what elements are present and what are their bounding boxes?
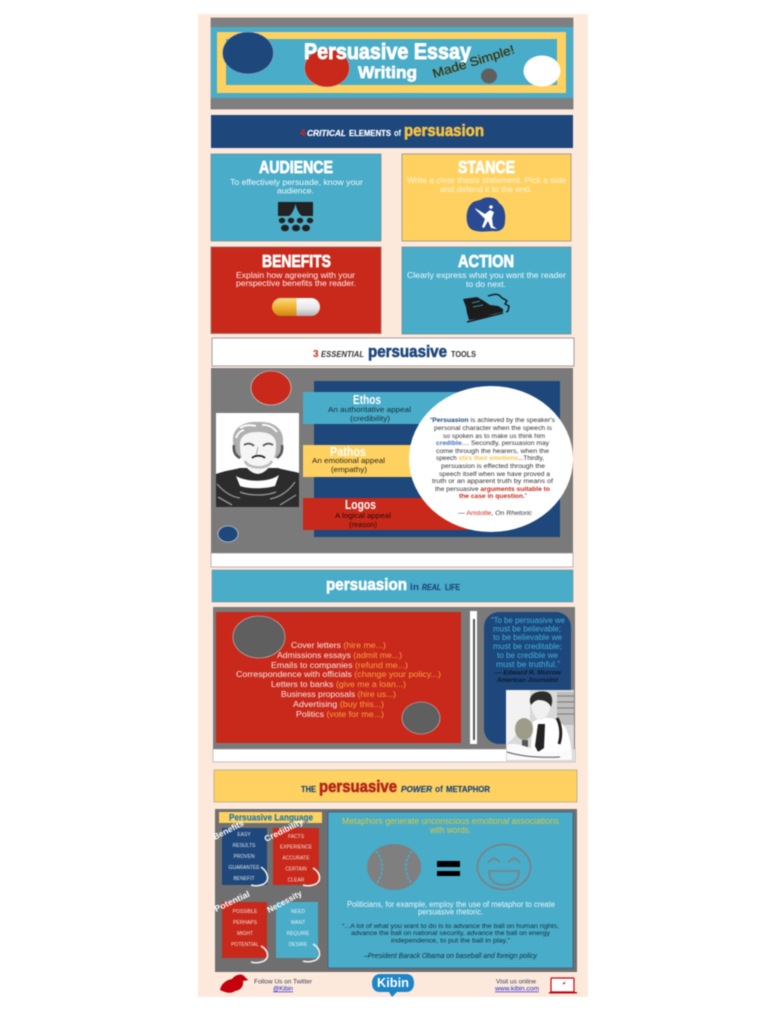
card: benefits words: RESULTS bbox=[233, 843, 256, 849]
panel: audience: AUDIENCE bbox=[259, 157, 333, 177]
panel: stance bbox=[402, 154, 571, 241]
heading: 4 critical elements of persuasion: CRITICAL bbox=[307, 128, 346, 138]
callout: Aristotle quote: truth or an apparent truth by means of bbox=[432, 478, 553, 485]
panel: audience bbox=[211, 154, 381, 241]
heading: persuasion in real life: in bbox=[410, 582, 419, 592]
card: necessity words: Necessity bbox=[265, 888, 304, 915]
card: logos: Logos bbox=[345, 497, 376, 512]
panel: stance: STANCE bbox=[458, 157, 515, 177]
panel: metaphor explanation: “...A lot of what you want to do is to advance the ball on human rights, bbox=[342, 923, 559, 930]
callout: Aristotle quote: so spoken as to make us think him bbox=[443, 433, 545, 440]
examples list: Business proposals (hire us...) bbox=[281, 689, 396, 699]
icon: theatre audience bbox=[278, 202, 313, 231]
examples list bbox=[216, 612, 461, 743]
heading: 4 critical elements of persuasion: ELEMENTS bbox=[349, 128, 391, 138]
heading: 3 essential persuasive tools: persuasive bbox=[368, 343, 447, 361]
card: potential words bbox=[213, 889, 268, 963]
panel: metaphor explanation: persuasive rhetoric. bbox=[418, 908, 483, 916]
callout: Aristotle quote: credible.... Secondly, persuasion may bbox=[436, 440, 550, 447]
panel: stance: and defend it to the end. bbox=[440, 184, 532, 194]
icon: baseball bbox=[367, 844, 421, 890]
card: logos: (reason) bbox=[349, 520, 377, 529]
heading: 3 essential persuasive tools bbox=[212, 338, 574, 366]
footer: Kibin logo: Kibin bbox=[377, 975, 409, 990]
footer: twitter follow: @Kibin bbox=[273, 986, 293, 992]
panel: audience: audience. bbox=[277, 186, 314, 196]
card: logos: A logical appeal bbox=[335, 511, 391, 520]
heading: 4 critical elements of persuasion: of bbox=[394, 128, 402, 138]
panel: real life examples bbox=[213, 607, 575, 762]
callout: Murrow quote bbox=[484, 612, 571, 744]
header banner: Made Simple! bbox=[431, 43, 516, 81]
callout: Aristotle quote: personal character when the speech is bbox=[434, 425, 553, 432]
card: benefits words: GUARANTEE bbox=[228, 865, 260, 871]
heading: the persuasive power of metaphor: POWER bbox=[401, 784, 433, 794]
heading: persuasion in real life: REAL bbox=[422, 582, 441, 592]
examples list: Politics (vote for me...) bbox=[296, 709, 384, 719]
heading: the persuasive power of metaphor: of bbox=[435, 784, 444, 794]
callout: Aristotle quote: “Persuasion is achieved by the speaker's bbox=[430, 417, 556, 424]
card: credibility words: CERTAIN bbox=[285, 866, 307, 872]
card: credibility words: ACCURATE bbox=[282, 856, 310, 862]
heading: the persuasive power of metaphor: METAPHOR bbox=[446, 784, 490, 794]
card: pathos: An emotional appeal bbox=[312, 456, 385, 465]
callout: Murrow quote: “To be persuasive we bbox=[491, 616, 566, 625]
card: benefits words: BENEFIT bbox=[233, 876, 255, 882]
card: credibility words: EXPERIENCE bbox=[280, 844, 313, 850]
card: credibility words: Credibility bbox=[262, 816, 305, 844]
portrait: Aristotle bbox=[216, 413, 299, 507]
panel: benefits bbox=[211, 247, 381, 334]
heading: the persuasive power of metaphor bbox=[214, 770, 577, 802]
panel: metaphor explanation: Politicians, for example, employ the use of metaphor to create bbox=[347, 900, 555, 909]
card: necessity words: NEED bbox=[291, 909, 305, 915]
callout: Aristotle quote: speech itself when we have proved a bbox=[439, 471, 550, 478]
panel: action bbox=[402, 247, 571, 334]
panel: metaphor explanation: with words. bbox=[429, 825, 471, 835]
heading: the persuasive power of metaphor: persuasive bbox=[319, 778, 397, 796]
panel: metaphor explanation: Metaphors generate unconscious emotional associations bbox=[342, 816, 560, 826]
heading: persuasion in real life: LIFE bbox=[445, 582, 460, 592]
panel: three tools bbox=[211, 368, 573, 567]
icon: red bird bbox=[220, 975, 248, 993]
panel: benefits: BENEFITS bbox=[262, 251, 331, 271]
panel: audience: To effectively persuade, know your bbox=[230, 177, 363, 187]
callout: Murrow quote: must be believable; bbox=[493, 624, 561, 634]
footer: Kibin logo bbox=[372, 974, 414, 997]
panel: metaphor explanation: independence, to put the ball in play.” bbox=[391, 938, 511, 944]
card: pathos: Pathos bbox=[330, 444, 366, 459]
icon: boot bbox=[463, 294, 509, 322]
examples list: Advertising (buy this...) bbox=[293, 699, 384, 709]
callout: Murrow quote: American Journalist bbox=[496, 677, 559, 684]
callout: Aristotle quote: come through the hearers, when the bbox=[436, 448, 549, 455]
examples list: Correspondence with officials (change your policy...) bbox=[236, 669, 441, 679]
examples list: Admissions essays (admit me...) bbox=[277, 650, 402, 660]
callout: Aristotle quote: persuasion is effected through the bbox=[441, 463, 545, 470]
header banner: Writing bbox=[358, 63, 417, 82]
examples list: Emails to companies (refund me...) bbox=[271, 660, 408, 670]
card: benefits words: Benefits bbox=[211, 818, 246, 842]
card: necessity words: REQUIRE bbox=[287, 931, 310, 937]
heading: persuasion in real life: persuasion bbox=[326, 576, 407, 594]
card: potential words: POSSIBLE bbox=[233, 909, 258, 915]
callout: Murrow quote: to be believable we bbox=[493, 633, 563, 642]
card: ethos: Ethos bbox=[353, 392, 381, 407]
examples list: Letters to banks (give me a loan...) bbox=[271, 679, 406, 689]
panel: metaphor explanation: advance the ball on national security, advance the ball on energy bbox=[351, 930, 551, 937]
portrait: Edward R. Murrow bbox=[506, 690, 574, 762]
card: potential words: MIGHT bbox=[237, 931, 253, 937]
callout: Aristotle quote: speech stirs their emotions...Thirdly, bbox=[436, 455, 544, 462]
footer: website link bbox=[494, 978, 577, 994]
heading: 3 essential persuasive tools: TOOLS bbox=[451, 349, 476, 359]
icon: laughing face bbox=[478, 844, 530, 890]
panel: stance: Write a clear thesis statement. Pick a side bbox=[407, 175, 566, 185]
heading: the persuasive power of metaphor: THE bbox=[301, 784, 316, 794]
heading: 3 essential persuasive tools: ESSENTIAL bbox=[321, 349, 364, 359]
callout: Aristotle quote: the case in question.” bbox=[459, 493, 528, 500]
card: necessity words bbox=[265, 888, 320, 962]
callout: Murrow quote: must be truthful.” bbox=[496, 660, 560, 669]
icon: pill bbox=[272, 298, 320, 316]
card: necessity words: WANT bbox=[291, 920, 305, 926]
card: credibility words bbox=[262, 816, 320, 886]
label: persuasive language: Persuasive Language bbox=[229, 812, 313, 822]
footer: twitter follow: Follow Us on Twitter bbox=[254, 978, 313, 986]
card: potential words: Potential bbox=[213, 889, 251, 914]
header banner: Persuasive Essay bbox=[304, 39, 472, 64]
panel: action: to do next. bbox=[466, 279, 506, 289]
panel: action: ACTION bbox=[458, 251, 514, 271]
callout: Aristotle quote: the persuasive arguments suitable to bbox=[435, 486, 550, 493]
panel: metaphor explanation bbox=[328, 812, 573, 968]
callout: Murrow quote: to be credible we bbox=[497, 651, 559, 660]
card: pathos: (empathy) bbox=[331, 465, 367, 474]
callout: Murrow quote: — Edward R. Murrow bbox=[494, 670, 562, 676]
footer: website link: www.kibin.com bbox=[494, 986, 539, 992]
card: ethos: (credibility) bbox=[350, 414, 390, 423]
examples list: Cover letters (hire me...) bbox=[291, 640, 386, 650]
footer: twitter follow bbox=[220, 975, 313, 993]
callout: Aristotle quote: — Aristotle, On Rhetoric bbox=[458, 510, 533, 517]
card: credibility words: CLEAR bbox=[288, 878, 305, 884]
card: benefits words: EASY bbox=[237, 832, 251, 838]
icon: equals sign bbox=[437, 861, 460, 876]
panel: metaphor explanation: –President Barack Obama on baseball and foreign policy bbox=[363, 953, 537, 960]
card: credibility words: FACTS bbox=[288, 834, 305, 840]
card: logos bbox=[303, 497, 468, 530]
header banner bbox=[211, 18, 573, 109]
heading: 4 critical elements of persuasion: persuasion bbox=[404, 122, 484, 140]
footer: website link: Visit us online bbox=[496, 978, 536, 986]
card: potential words: POTENTIAL bbox=[231, 942, 259, 948]
card: benefits words bbox=[211, 818, 268, 886]
icon: laptop bbox=[549, 978, 577, 994]
card: pathos bbox=[303, 444, 428, 477]
heading: 4 critical elements of persuasion bbox=[211, 115, 573, 148]
panel: metaphor bbox=[211, 809, 577, 972]
card: necessity words: DESIRE bbox=[289, 942, 308, 948]
icon: martial arts kick bbox=[467, 197, 505, 232]
heading: 4 critical elements of persuasion: 4 bbox=[300, 128, 306, 139]
panel: action: Clearly express what you want the reader bbox=[407, 270, 566, 280]
heading: 3 essential persuasive tools: 3 bbox=[313, 349, 319, 360]
panel: benefits: perspective benefits the reader. bbox=[236, 278, 356, 288]
panel: benefits: Explain how agreeing with your bbox=[236, 270, 355, 280]
callout: Aristotle quote bbox=[409, 386, 573, 532]
card: ethos: An authoritative appeal bbox=[328, 405, 411, 414]
card: ethos bbox=[303, 392, 468, 424]
heading: persuasion in real life bbox=[212, 570, 573, 602]
callout: Murrow quote: must be creditable; bbox=[493, 642, 562, 651]
card: potential words: PERHAPS bbox=[233, 920, 258, 926]
card: benefits words: PROVEN bbox=[233, 854, 255, 860]
